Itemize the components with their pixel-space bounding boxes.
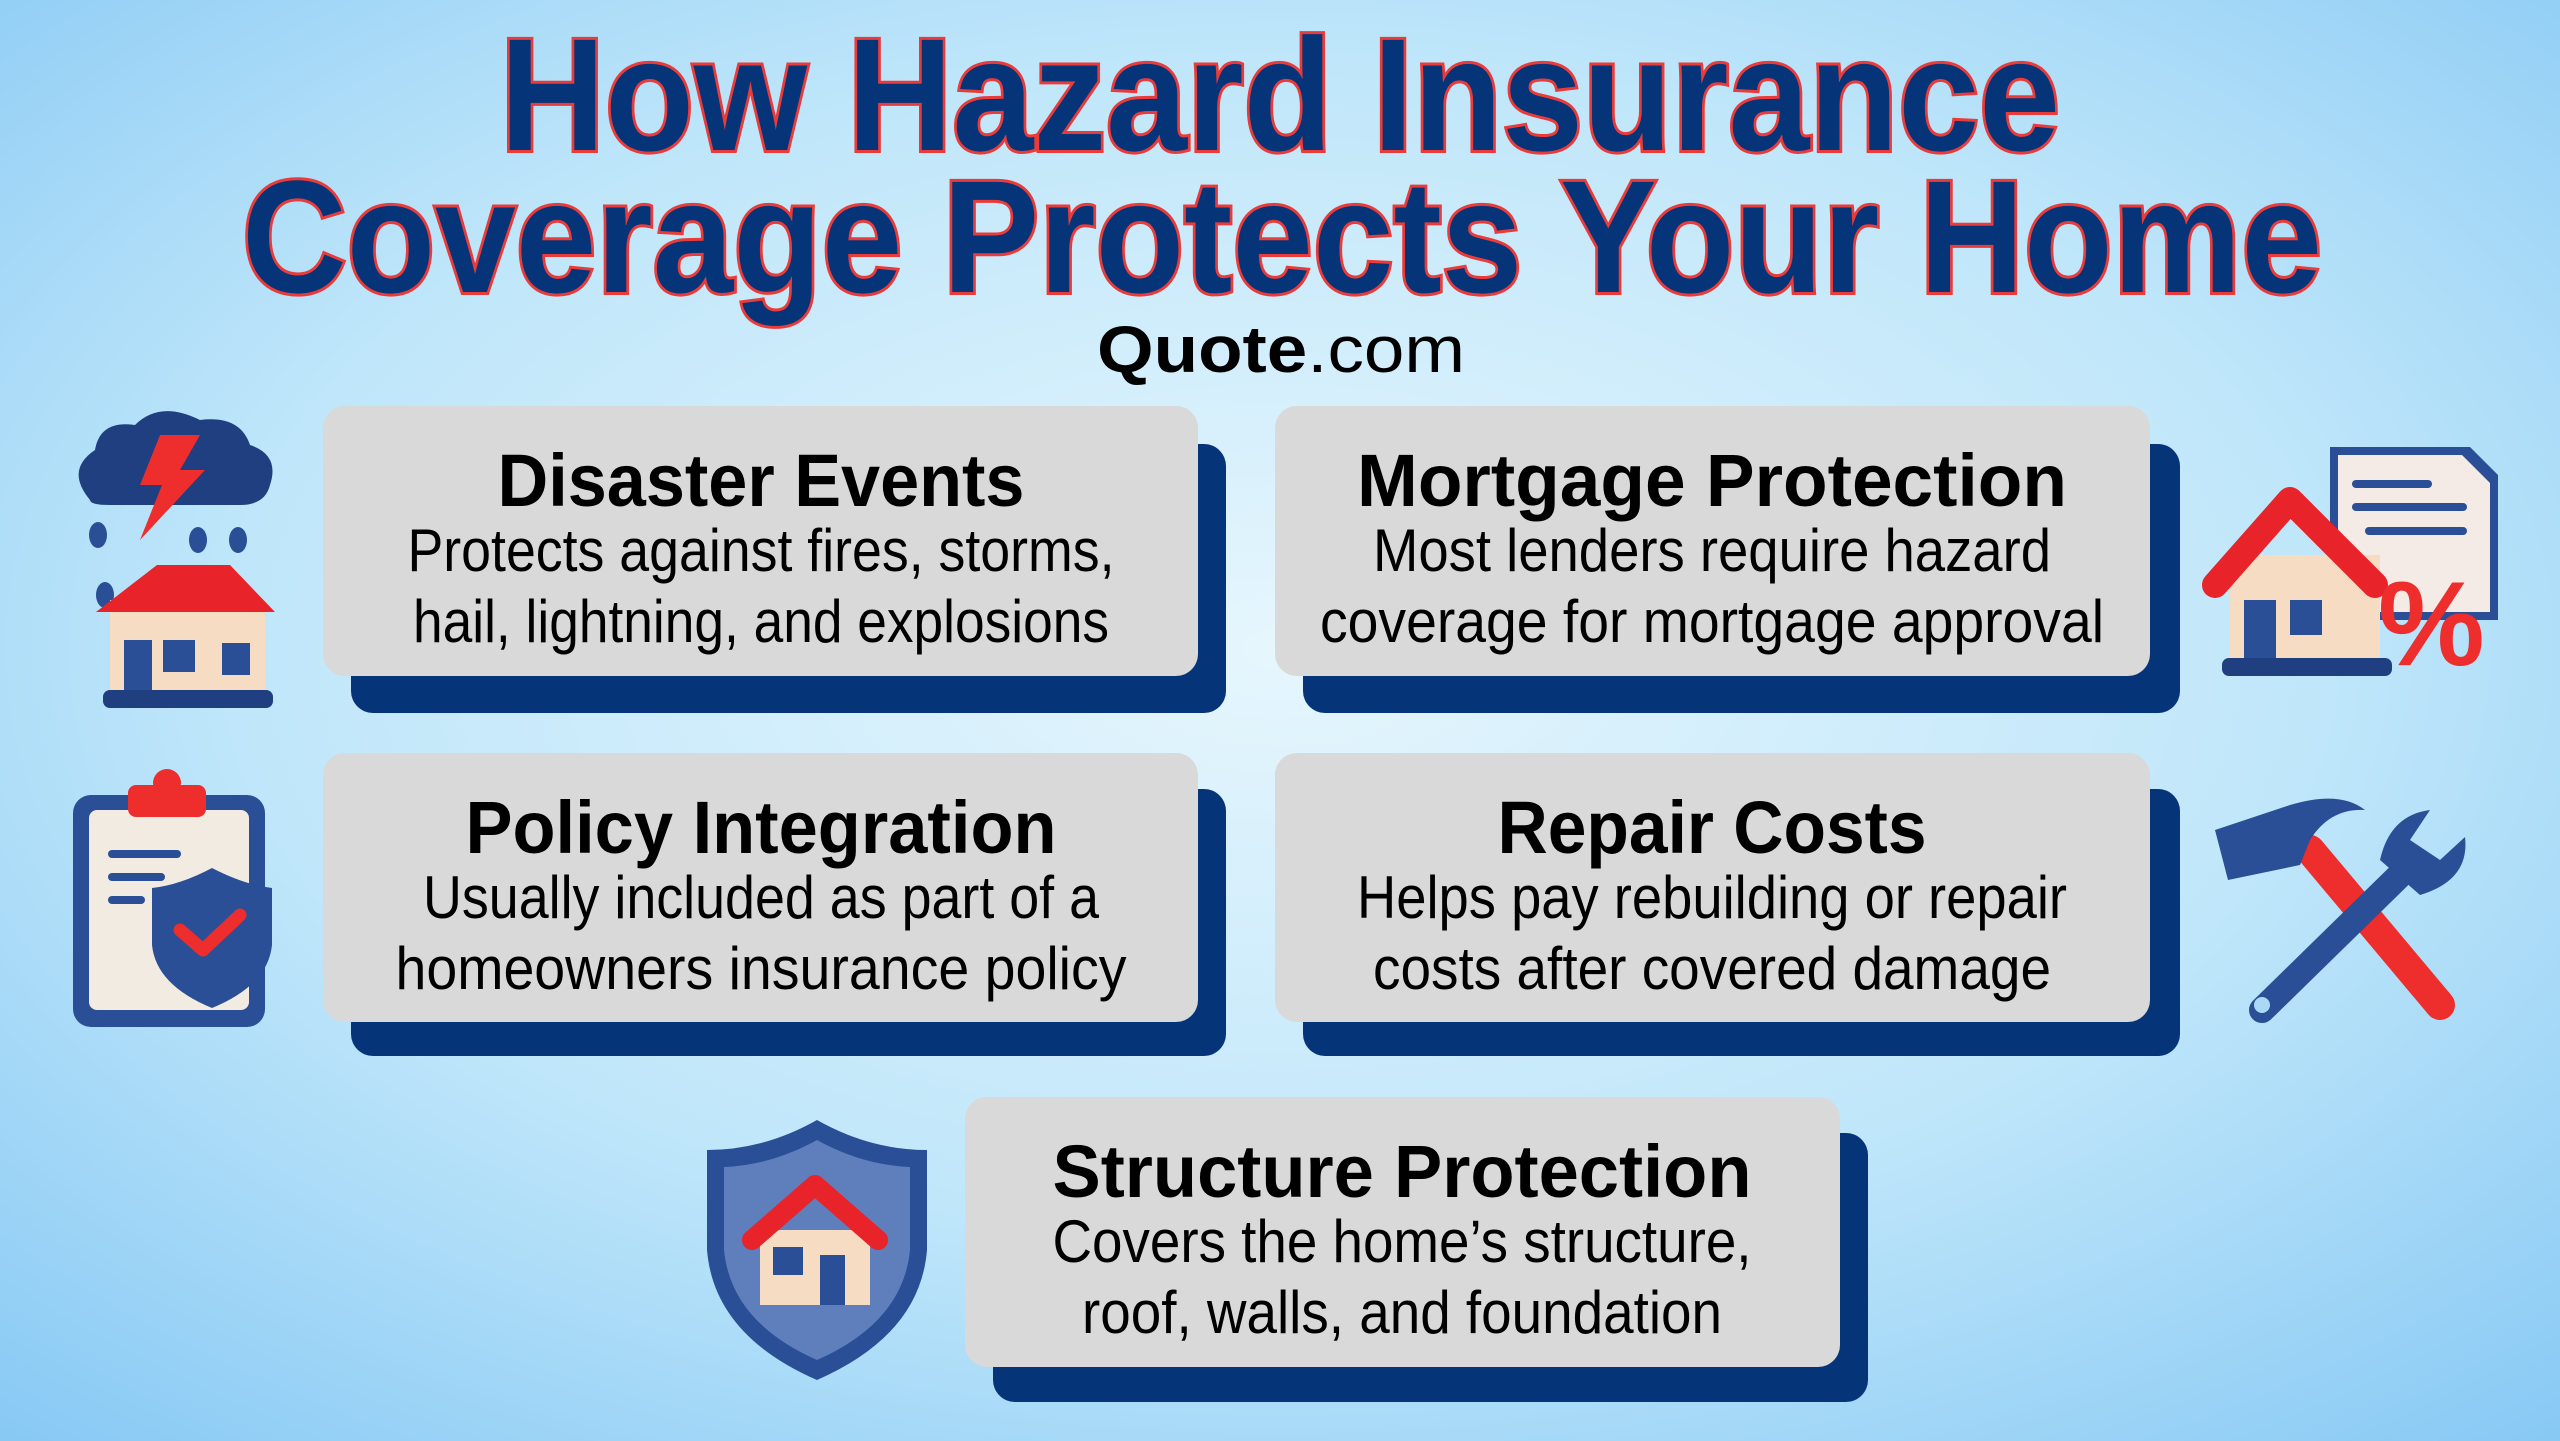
card: Policy Integration: Usually included as part of a xyxy=(423,864,1100,931)
card: Policy Integration: Policy Integration xyxy=(466,786,1056,869)
card: Policy Integration xyxy=(323,753,1226,1056)
card: Repair Costs: costs after covered damage xyxy=(1373,935,2051,1002)
card: Disaster Events: hail, lightning, and explosions xyxy=(413,588,1109,655)
icon: hammer and wrench xyxy=(2215,799,2465,1013)
card: Repair Costs xyxy=(1275,753,2180,1056)
card: Mortgage Protection: Most lenders require hazard xyxy=(1373,517,2051,584)
title: How Hazard Insurance xyxy=(500,5,2060,184)
card: Structure Protection: roof, walls, and foundation xyxy=(1082,1279,1722,1346)
title: Coverage Protects Your Home xyxy=(242,147,2322,326)
icon: house with mortgage document: % xyxy=(2378,557,2485,691)
icon: shield with house xyxy=(707,1120,927,1380)
card: Disaster Events: Disaster Events xyxy=(498,439,1024,522)
card: Structure Protection xyxy=(965,1097,1868,1402)
card: Repair Costs: Helps pay rebuilding or repair xyxy=(1357,864,2067,931)
card: Mortgage Protection xyxy=(1275,406,2180,713)
icon: clipboard with shield check xyxy=(73,769,272,1027)
card: Mortgage Protection: coverage for mortgage approval xyxy=(1320,588,2104,655)
card: Mortgage Protection: Mortgage Protection xyxy=(1357,439,2067,522)
card: Structure Protection: Structure Protection xyxy=(1052,1130,1752,1213)
card: Disaster Events: Protects against fires, storms, xyxy=(408,517,1114,584)
icon: storm cloud over house xyxy=(79,411,275,708)
card: Disaster Events xyxy=(323,406,1226,713)
card: Policy Integration: homeowners insurance policy xyxy=(396,935,1126,1002)
card: Structure Protection: Covers the home’s structure, xyxy=(1052,1208,1752,1275)
title xyxy=(242,5,2322,326)
icon: house with mortgage document xyxy=(2215,447,2498,691)
brand: Quote.com: Quote .com xyxy=(1097,312,1465,386)
card: Repair Costs: Repair Costs xyxy=(1498,786,1926,869)
